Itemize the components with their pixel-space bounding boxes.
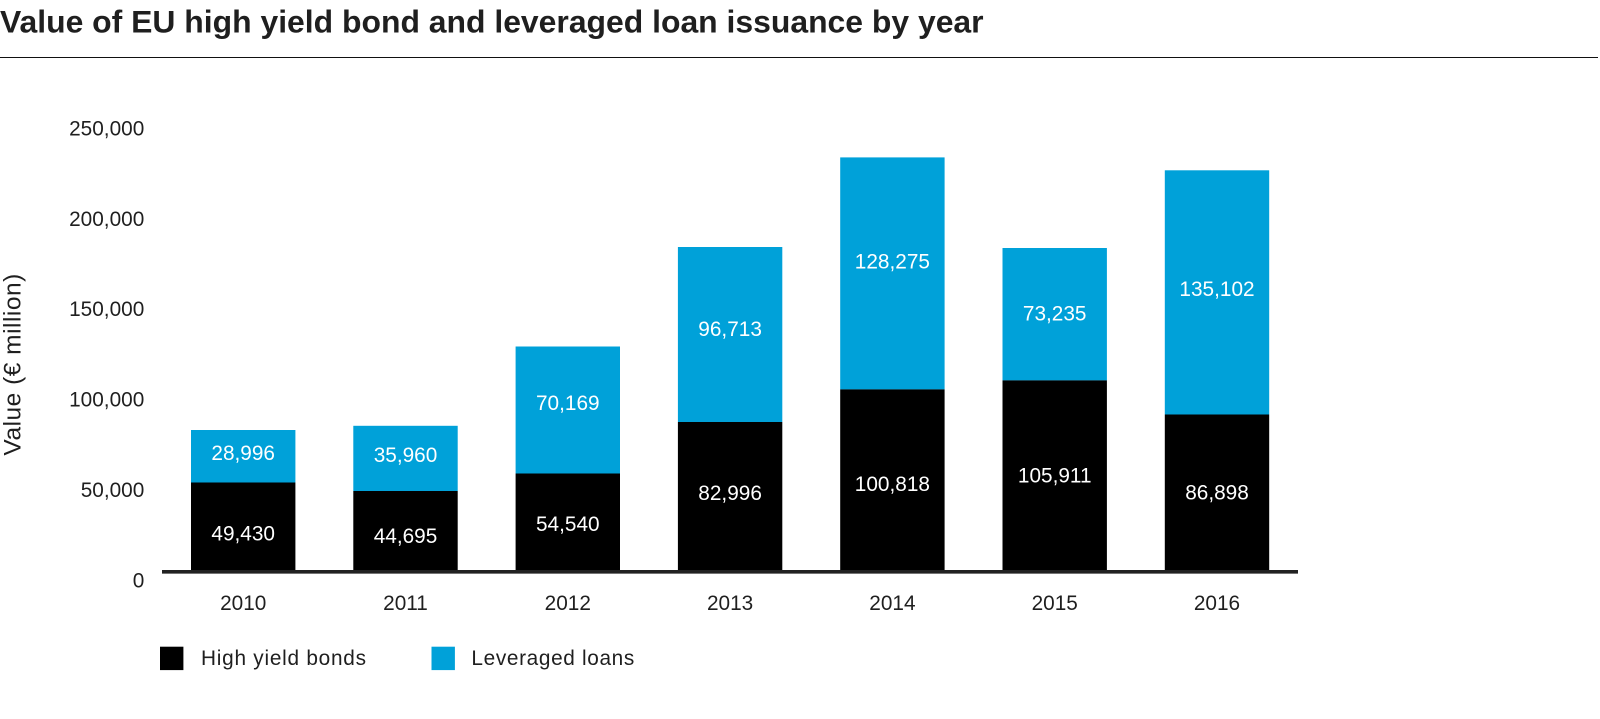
y axis labels: 100,000 xyxy=(69,389,144,412)
bar 2014: 2014 xyxy=(869,592,916,615)
bar 2010: 49,430 xyxy=(211,522,275,545)
legend xyxy=(160,647,635,670)
bar 2013 xyxy=(678,247,782,615)
y axis labels: 150,000 xyxy=(69,298,144,321)
bar 2015: 73,235 xyxy=(1023,302,1087,325)
bar 2011: 35,960 xyxy=(374,444,437,467)
bar 2013: 82,996 xyxy=(698,482,762,505)
bar 2015: 2015 xyxy=(1032,592,1078,615)
bar 2015 xyxy=(1002,248,1107,615)
y axis labels: 50,000 xyxy=(81,479,144,502)
title: Value of EU high yield bond and leveraged loan issuance by year xyxy=(0,4,984,40)
bar 2016: 2016 xyxy=(1194,592,1240,615)
bar 2010 xyxy=(191,430,295,615)
y axis labels: 200,000 xyxy=(69,208,144,231)
bar 2011 xyxy=(353,426,458,615)
y axis title: Value (€ million) xyxy=(0,273,27,456)
y axis labels: 0 xyxy=(133,569,144,592)
bar 2016: 135,102 xyxy=(1179,278,1255,301)
bar 2013: 96,713 xyxy=(698,318,762,341)
bar 2011: 44,695 xyxy=(374,525,437,548)
bar 2012: 2012 xyxy=(545,592,591,615)
bar 2012 xyxy=(516,346,620,615)
legend: leveraged loans: Leveraged loans xyxy=(471,647,635,670)
bar 2014: 128,275 xyxy=(855,250,930,273)
bar 2012: 70,169 xyxy=(536,392,600,415)
bar 2016 xyxy=(1165,170,1269,615)
bar 2015: 105,911 xyxy=(1018,465,1092,488)
bar 2016: 86,898 xyxy=(1185,482,1249,504)
bar 2014: 100,818 xyxy=(855,473,930,496)
bar 2010: 2010 xyxy=(220,592,266,615)
bar 2010: 28,996 xyxy=(211,442,275,465)
y axis labels: 250,000 xyxy=(69,117,144,140)
bar 2011: 2011 xyxy=(383,592,428,615)
bar 2012: 54,540 xyxy=(536,513,600,536)
bar 2014 xyxy=(840,157,945,615)
bar 2013: 2013 xyxy=(707,592,753,615)
legend: high yield bonds: High yield bonds xyxy=(201,647,367,670)
bar chart xyxy=(191,157,1269,615)
y axis labels xyxy=(69,117,144,592)
